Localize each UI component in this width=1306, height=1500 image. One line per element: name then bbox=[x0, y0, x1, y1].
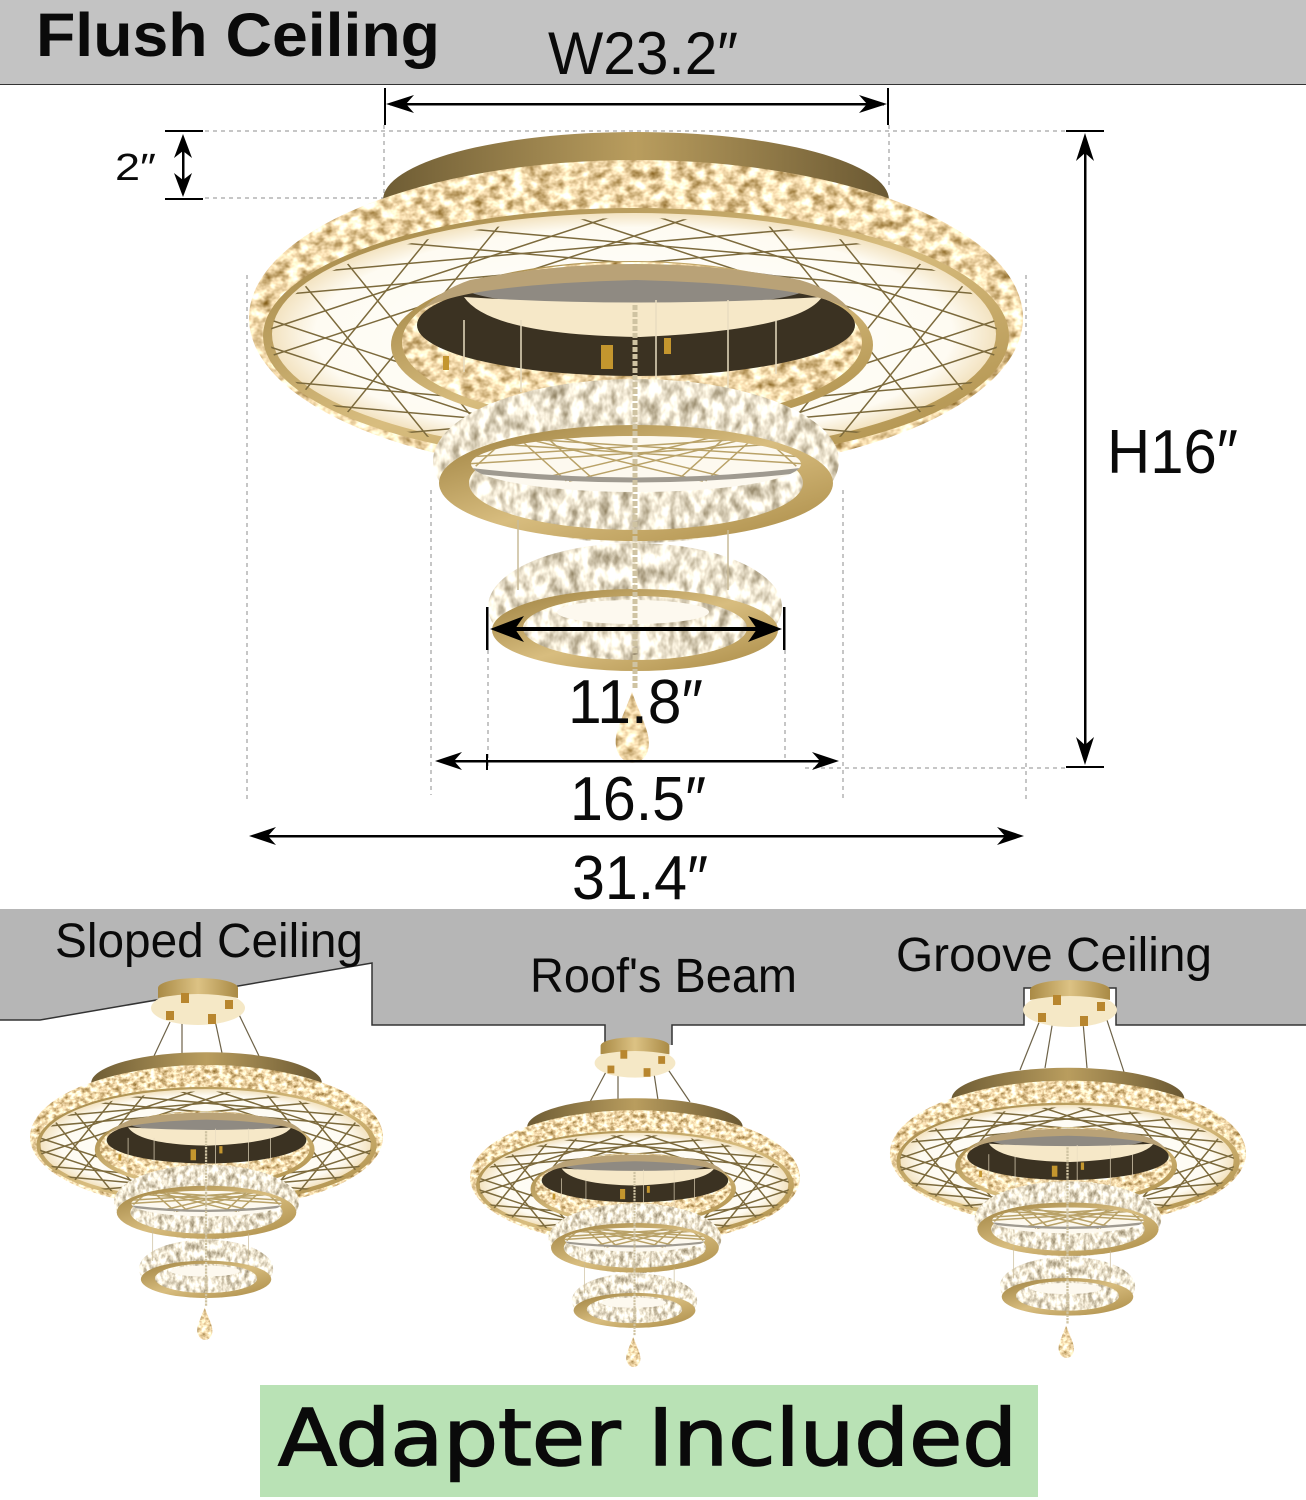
lower grey ceiling profile bbox=[0, 909, 1306, 1045]
groove ceiling chandelier bbox=[823, 980, 1306, 1358]
label: H16: H16″ bbox=[1107, 418, 1238, 487]
label: Roof's Beam: Roof's Beam bbox=[530, 950, 797, 1003]
label: 31.4: 31.4″ bbox=[572, 844, 708, 913]
arrow: 16.5 inch bbox=[435, 752, 839, 770]
width label W23.2: W23.2″ bbox=[548, 20, 738, 87]
arrow: top width bbox=[384, 88, 889, 125]
arrow: total height bbox=[1066, 130, 1104, 768]
sloped ceiling chandelier bbox=[0, 978, 447, 1340]
ceiling profile outline bbox=[0, 963, 1306, 1045]
label: Groove Ceiling: Groove Ceiling bbox=[896, 929, 1212, 982]
green banner: Adapter Included: Adapter Included bbox=[278, 1394, 1017, 1484]
main chandelier illustration bbox=[104, 132, 1164, 763]
arrow: 11.8 inch bbox=[486, 607, 786, 650]
top grey bar bbox=[0, 0, 1306, 84]
dashed guide lines bbox=[205, 125, 1065, 800]
roof's beam chandelier bbox=[408, 1037, 860, 1367]
label: 2 inch: 2″ bbox=[115, 147, 156, 189]
arrow: 31.4 inch bbox=[249, 827, 1024, 845]
arrow: 2 inch height bbox=[165, 130, 203, 200]
green banner: Adapter Included bbox=[260, 1385, 1038, 1497]
title: Flush Ceiling: Flush Ceiling bbox=[36, 1, 440, 69]
label: 11.8: 11.8″ bbox=[568, 668, 703, 737]
label: 16.5: 16.5″ bbox=[570, 765, 706, 834]
label: Sloped Ceiling: Sloped Ceiling bbox=[55, 915, 363, 968]
